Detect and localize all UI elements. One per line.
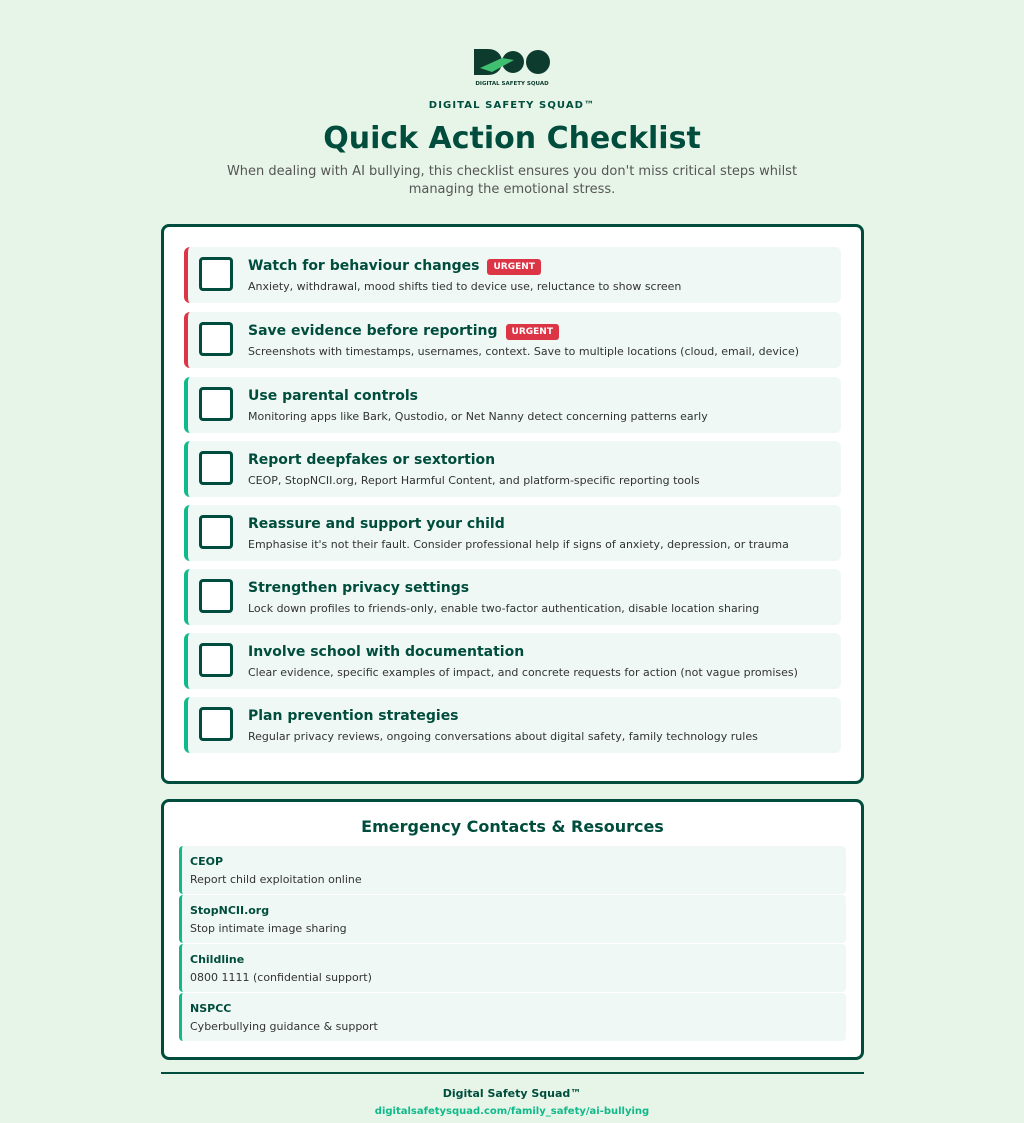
footer: [375, 1087, 649, 1117]
resource: StopNCII: [179, 895, 846, 943]
item 8: Regular privacy reviews, ongoing conversations about digital safety, family technology rules: [248, 730, 758, 743]
item 7: [184, 633, 841, 689]
item 4: CEOP, StopNCII.org, Report Harmful Content, and platform-specific reporting tools: [248, 474, 700, 487]
item 6: [184, 569, 841, 625]
resource: Childline: [179, 944, 846, 992]
resource: StopNCII: Stop intimate image sharing: [190, 922, 347, 935]
item 2: Save evidence before reporting: [248, 323, 498, 339]
footer: Digital Safety Squad™: [443, 1087, 581, 1100]
title: Quick Action Checklist: [323, 121, 701, 156]
item 7: Involve school with documentation: [248, 644, 524, 660]
resource: CEOP: [179, 846, 846, 894]
panel: resources: [161, 799, 864, 1060]
logo: [474, 49, 550, 87]
resource: StopNCII: StopNCII.org: [190, 904, 269, 917]
resource: CEOP: Report child exploitation online: [190, 873, 362, 886]
resource: Childline: 0800 1111 (confidential support): [190, 971, 372, 984]
logo: DIGITAL SAFETY SQUAD: [475, 81, 549, 87]
resource: NSPCC: Cyberbullying guidance & support: [190, 1020, 378, 1033]
item 1: [184, 247, 841, 303]
brand name: DIGITAL SAFETY SQUAD™: [429, 100, 595, 111]
item 4: [184, 441, 841, 497]
item 4: Report deepfakes or sextortion: [248, 452, 495, 468]
footer: digitalsafetysquad.com/family_safety/ai-bullying: [375, 1106, 649, 1117]
item 1: Anxiety, withdrawal, mood shifts tied to device use, reluctance to show screen: [248, 280, 681, 293]
item 1: Watch for behaviour changes: [248, 258, 479, 274]
resource: NSPCC: NSPCC: [190, 1002, 231, 1015]
item 5: [184, 505, 841, 561]
item 8: [184, 697, 841, 753]
item 3: Monitoring apps like Bark, Qustodio, or Net Nanny detect concerning patterns early: [248, 410, 708, 423]
item 5: Emphasise it's not their fault. Consider professional help if signs of anxiety, depression, or trauma: [248, 538, 789, 551]
resource: CEOP: CEOP: [190, 855, 223, 868]
subtitle: When dealing with AI bullying, this checklist ensures you don't miss critical steps whilst managing the emotional stress.: [227, 164, 797, 197]
item 7: Clear evidence, specific examples of impact, and concrete requests for action (not vague promises): [248, 666, 798, 679]
panel: checklist: [161, 224, 864, 784]
resource: NSPCC: [179, 993, 846, 1041]
item 2: Screenshots with timestamps, usernames, context. Save to multiple locations (cloud, email, device): [248, 345, 799, 358]
item 3: [184, 377, 841, 433]
item 1: URGENT: [493, 262, 535, 272]
item 3: Use parental controls: [248, 388, 418, 404]
resources heading: Emergency Contacts & Resources: [361, 817, 664, 836]
resource: Childline: Childline: [190, 953, 244, 966]
item 6: Lock down profiles to friends-only, enable two-factor authentication, disable location sharing: [248, 602, 759, 615]
item 2: URGENT: [512, 327, 553, 337]
item 5: Reassure and support your child: [248, 516, 505, 532]
item 8: Plan prevention strategies: [248, 708, 459, 724]
item 2: [184, 312, 841, 368]
item 6: Strengthen privacy settings: [248, 580, 469, 596]
